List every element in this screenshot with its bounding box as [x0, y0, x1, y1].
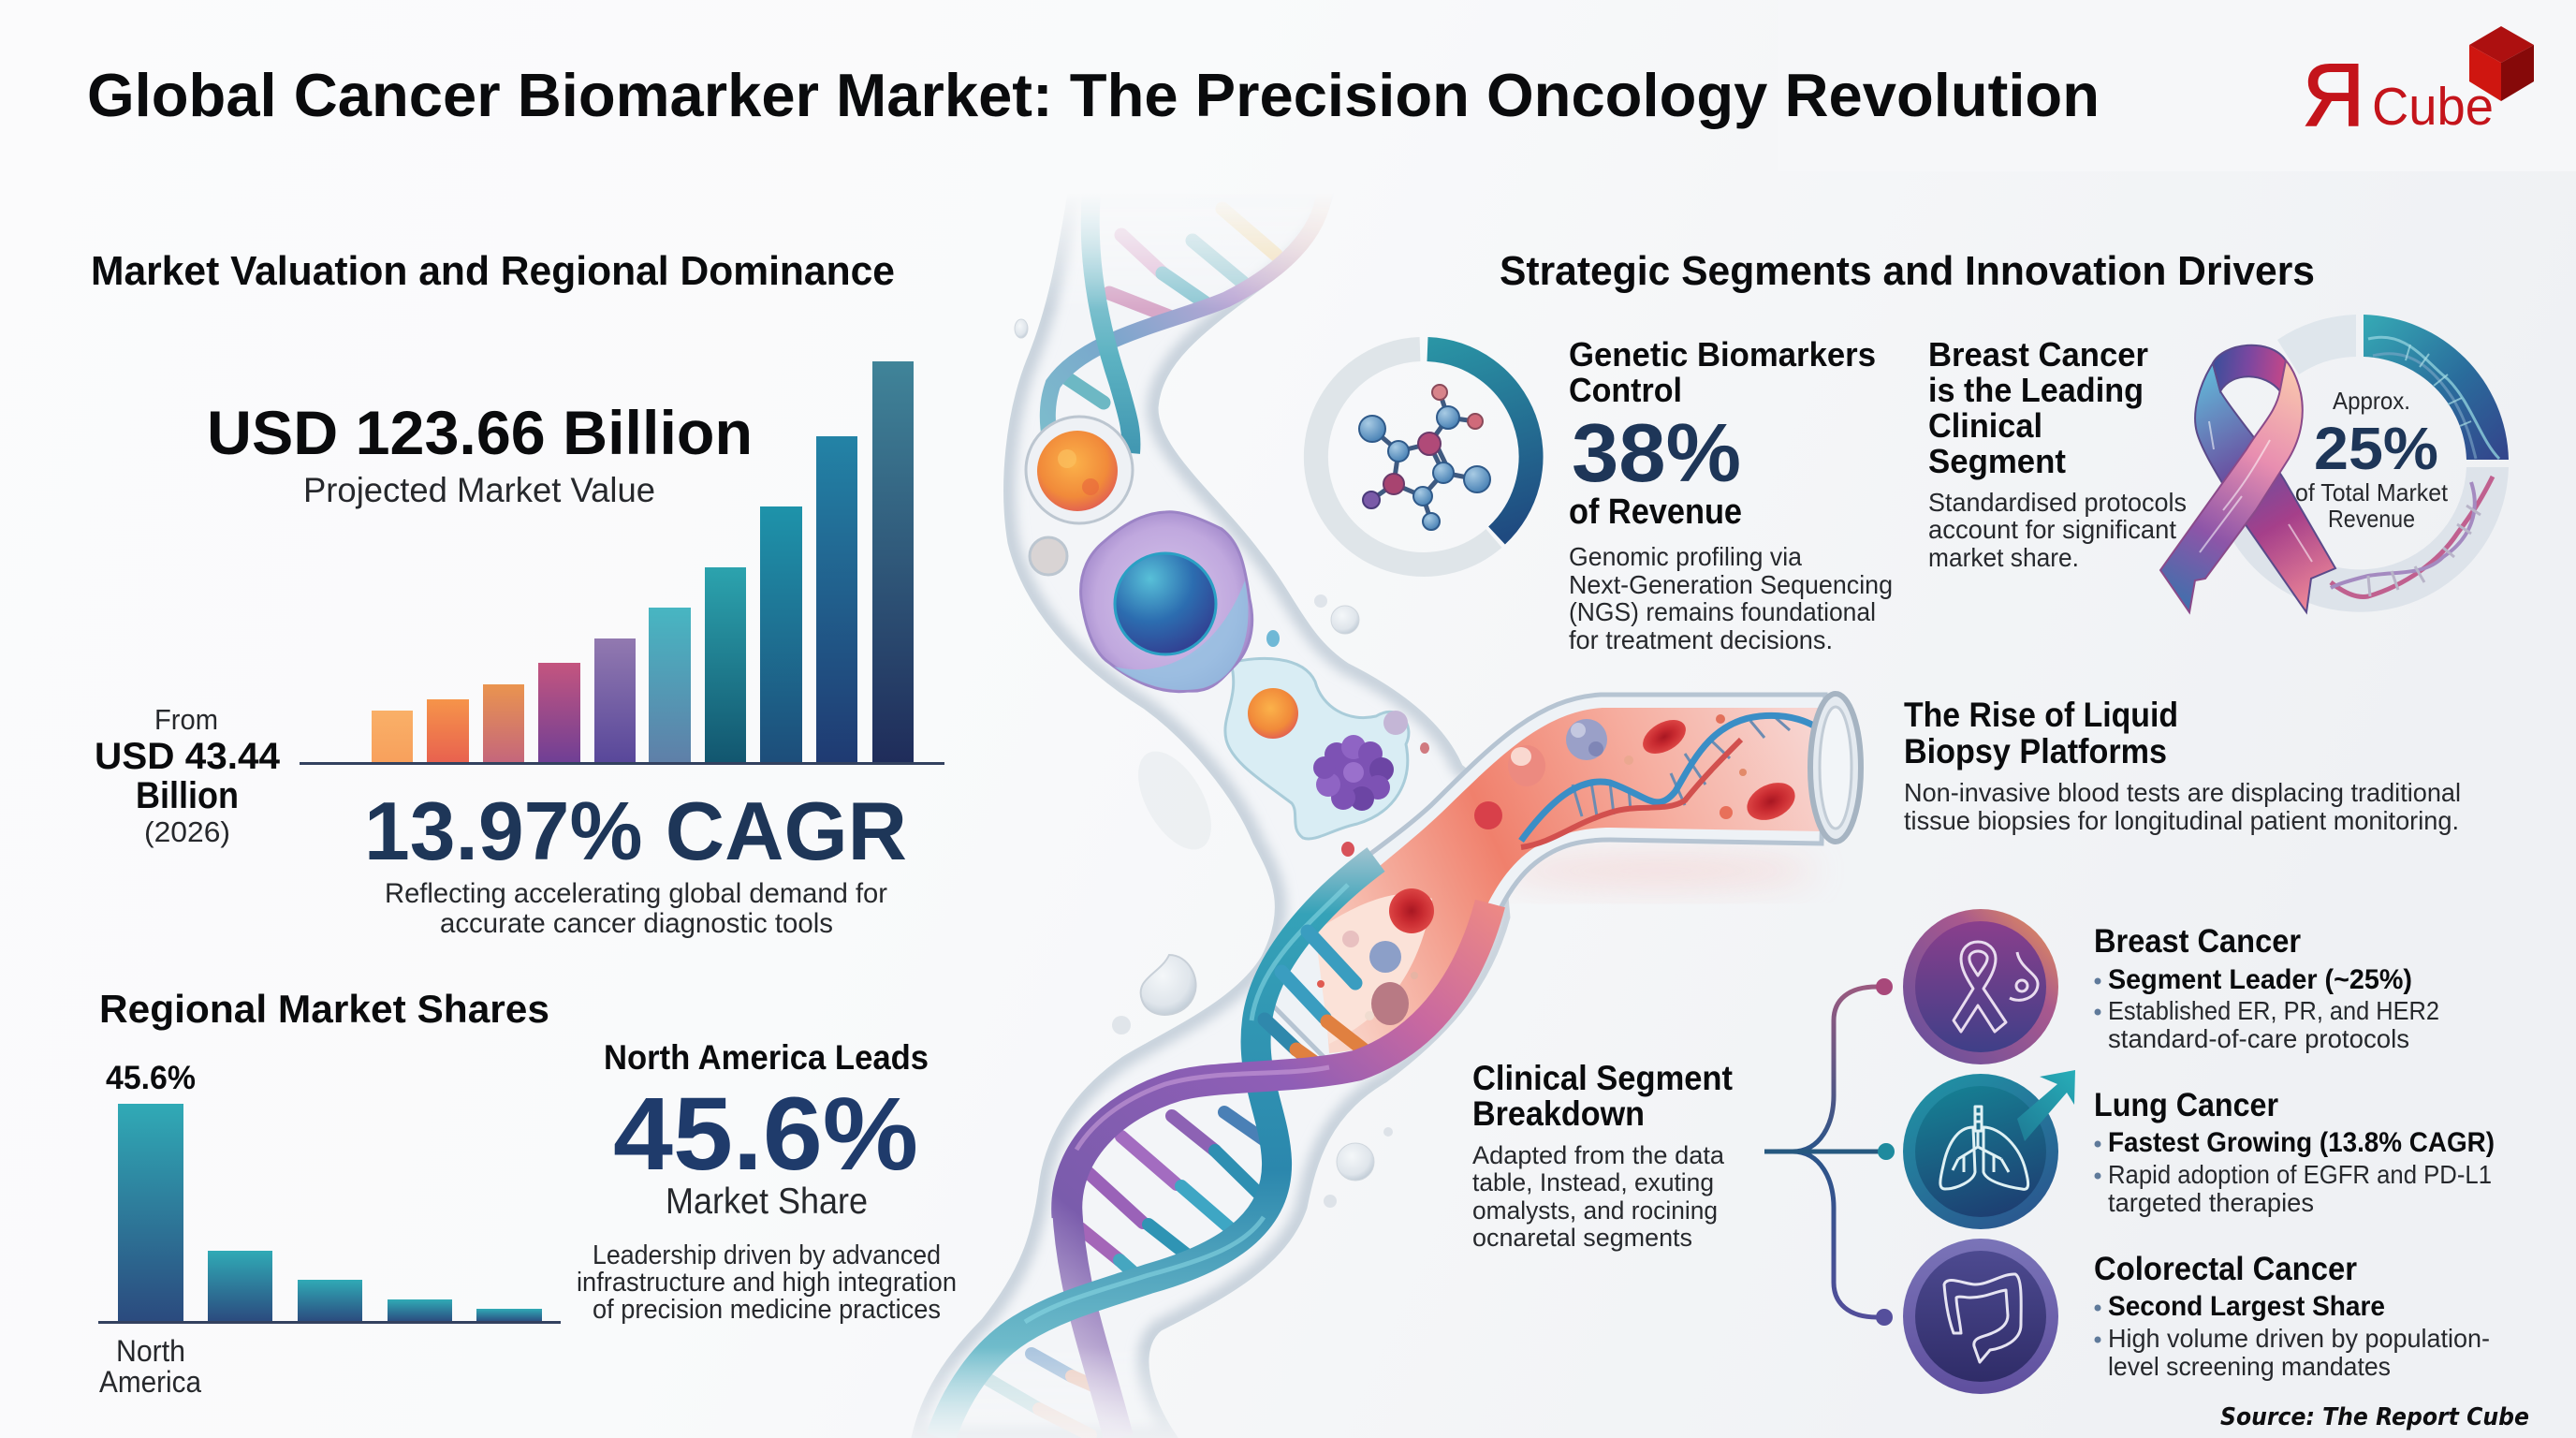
starting value label: (2026) — [144, 815, 230, 848]
callout: North America leads: 45.6% — [613, 1077, 918, 1192]
spiky grey cell — [1566, 719, 1607, 760]
ring label: of Total Market — [2295, 478, 2449, 506]
starting value label: USD 43.44 — [95, 736, 281, 777]
heading: market valuation: Market Valuation and Regional Dominance — [91, 248, 895, 294]
ring label: Approx. — [2333, 387, 2410, 415]
DNA inside tube — [1521, 715, 1827, 847]
lung cancer segment details: targeted therapies — [2108, 1188, 2314, 1217]
pink shadow beneath tube — [1498, 856, 1816, 886]
callout: North America leads — [577, 1038, 957, 1325]
colorectal cancer segment details: Second Largest Share — [2108, 1291, 2385, 1322]
liquid biopsy text — [1904, 696, 2461, 835]
breast cancer segment details — [2094, 923, 2439, 1053]
central illustration: DNA, cells and liquid biopsy tube — [913, 187, 1861, 1438]
logo: RCube: Я — [2303, 46, 2364, 144]
liquid biopsy text: The Rise of Liquid — [1904, 696, 2178, 734]
icon: awareness ribbon — [2160, 345, 2335, 612]
bar chart: regional shares — [98, 1060, 561, 1399]
lower DNA purple strand back section — [1067, 1208, 1119, 1438]
clinical segment breakdown text: Adapted from the data — [1472, 1141, 1725, 1169]
lung cancer segment details: Fastest Growing (13.8% CAGR) — [2108, 1127, 2495, 1158]
genetic biomarkers text: Next-Generation Sequencing — [1569, 570, 1893, 599]
callout: North America leads: North America Leads — [604, 1038, 929, 1077]
starting value label: Billion — [136, 775, 239, 816]
lung cancer segment details: Rapid adoption of EGFR and PD-L1 — [2108, 1160, 2492, 1189]
logo: RCube — [2303, 26, 2534, 144]
projected market value callout: USD 123.66 Billion — [207, 398, 753, 467]
genetic biomarkers text: Genetic Biomarkers — [1569, 335, 1876, 374]
breast cancer leading segment text: Breast Cancer — [1928, 335, 2148, 374]
starting value label: From — [154, 703, 218, 736]
breast cancer segment details: Established ER, PR, and HER2 — [2108, 996, 2439, 1025]
membrane backdrop — [913, 187, 1509, 1438]
heading: regional market shares: Regional Market Shares — [99, 987, 549, 1031]
colorectal cancer icon — [1903, 1239, 2058, 1394]
projected market value callout — [207, 398, 753, 509]
bar chart: regional shares: America — [99, 1365, 201, 1399]
callout: North America leads: infrastructure and high integration — [577, 1268, 957, 1298]
genetic biomarkers text: 38% — [1572, 406, 1741, 499]
logo: RCube: Cube — [2372, 77, 2494, 137]
teal dividing cell — [1225, 658, 1409, 839]
lower DNA teal strand — [941, 859, 1376, 1438]
breast cancer leading segment text: is the Leading — [1928, 371, 2144, 409]
bar chart: market growth — [300, 361, 944, 765]
heading: strategic segments: Strategic Segments and Innovation Drivers — [1500, 248, 2315, 294]
liquid biopsy text: Non-invasive blood tests are displacing traditional — [1904, 778, 2461, 807]
genetic biomarkers text: for treatment decisions. — [1569, 625, 1833, 654]
ring label — [2295, 387, 2449, 533]
floating droplets — [1015, 319, 1429, 1208]
lung cancer segment details — [2094, 1087, 2495, 1217]
lower DNA purple strand front — [1067, 903, 1490, 1217]
icon: lungs line art — [1940, 1107, 2028, 1189]
CAGR callout: Reflecting accelerating global demand for — [385, 878, 887, 909]
clinical segment breakdown text: omalysts, and rocining — [1472, 1196, 1718, 1225]
clinical segment breakdown text — [1472, 1059, 1733, 1252]
breast cancer leading segment text: account for significant — [1928, 515, 2176, 544]
small orange cell — [1248, 688, 1298, 739]
CAGR callout: accurate cancer diagnostic tools — [440, 908, 833, 939]
ring label: 25% — [2314, 415, 2438, 482]
CAGR callout: 13.97% CAGR — [364, 785, 907, 877]
purple cell with nucleus — [1081, 512, 1252, 692]
bar chart: regional shares: North — [116, 1334, 185, 1368]
liquid biopsy tube — [1254, 694, 1861, 1064]
liquid biopsy text: tissue biopsies for longitudinal patient monitoring. — [1904, 806, 2459, 835]
clinical segment breakdown text: table, Instead, exuting — [1472, 1168, 1714, 1196]
callout: North America leads: Market Share — [666, 1181, 868, 1222]
cells in lower tube — [1317, 888, 1434, 1025]
DNA motif in upper ring segment — [2368, 337, 2499, 459]
genetic biomarkers text: of Revenue — [1569, 492, 1742, 532]
header band tint — [1778, 0, 2576, 171]
clinical segment breakdown text: Breakdown — [1472, 1094, 1645, 1133]
icon: molecule — [1359, 385, 1490, 530]
breast cancer segment details: Segment Leader (~25%) — [2108, 964, 2412, 995]
breast cancer icon — [1903, 909, 2058, 1064]
icon: ribbon and breast line art — [1954, 942, 2038, 1032]
clinical segment breakdown text: ocnaretal segments — [1472, 1224, 1692, 1252]
source note: Source: The Report Cube — [2220, 1403, 2529, 1431]
tube opening — [1810, 694, 1861, 842]
mulberry tumour cell — [1313, 735, 1394, 811]
genetic biomarkers text: Genomic profiling via — [1569, 542, 1802, 571]
bar chart: regional shares: 45.6% — [106, 1060, 196, 1096]
CAGR callout — [364, 785, 907, 939]
genetic biomarkers text: Control — [1569, 371, 1682, 409]
colorectal cancer segment details: Colorectal Cancer — [2094, 1251, 2357, 1287]
colorectal cancer segment details: High volume driven by population- — [2108, 1324, 2490, 1353]
breast cancer segment details: standard-of-care protocols — [2108, 1024, 2409, 1053]
DNA motif in lower ring segment — [2331, 477, 2493, 597]
grey vesicle — [1030, 537, 1067, 575]
ring label: Revenue — [2328, 505, 2415, 533]
colorectal cancer segment details: level screening mandates — [2108, 1352, 2391, 1381]
lung cancer icon with growth arrow — [1903, 1070, 2075, 1229]
callout: North America leads: Leadership driven by advanced — [593, 1240, 941, 1270]
donut chart: genetic biomarkers 38% — [1316, 349, 1531, 565]
lower rungs in tube — [1265, 932, 1366, 1066]
liquid biopsy text: Biopsy Platforms — [1904, 732, 2167, 770]
breast cancer leading segment text — [1928, 335, 2187, 572]
callout: North America leads: of precision medicine practices — [593, 1295, 941, 1325]
genetic biomarkers text — [1569, 335, 1893, 654]
breast cancer leading segment text: Standardised protocols — [1928, 488, 2187, 517]
ring chart with ribbon: 25% of revenue — [2160, 315, 2509, 612]
upper DNA strands — [1047, 192, 1325, 453]
starting value label — [95, 703, 281, 848]
title: Global Cancer Biomarker Market: The Precision Oncology Revolution — [87, 61, 2100, 129]
lung cancer segment details: Lung Cancer — [2094, 1087, 2278, 1123]
breast cancer segment details: Breast Cancer — [2094, 923, 2301, 960]
genetic biomarkers text: (NGS) remains foundational — [1569, 597, 1876, 626]
colorectal cancer segment details — [2094, 1251, 2490, 1381]
projected market value callout: Projected Market Value — [303, 471, 655, 509]
icon: colon line art — [1944, 1274, 2021, 1362]
connector tree — [1764, 978, 1895, 1326]
lower DNA far rungs — [986, 1112, 1267, 1435]
orange cell — [1026, 417, 1133, 523]
clinical segment breakdown text: Clinical Segment — [1472, 1059, 1733, 1097]
breast cancer leading segment text: market share. — [1928, 543, 2079, 572]
breast cancer leading segment text: Segment — [1928, 442, 2066, 480]
arrow: fast growth — [2017, 1070, 2075, 1141]
breast cancer leading segment text: Clinical — [1928, 406, 2042, 445]
